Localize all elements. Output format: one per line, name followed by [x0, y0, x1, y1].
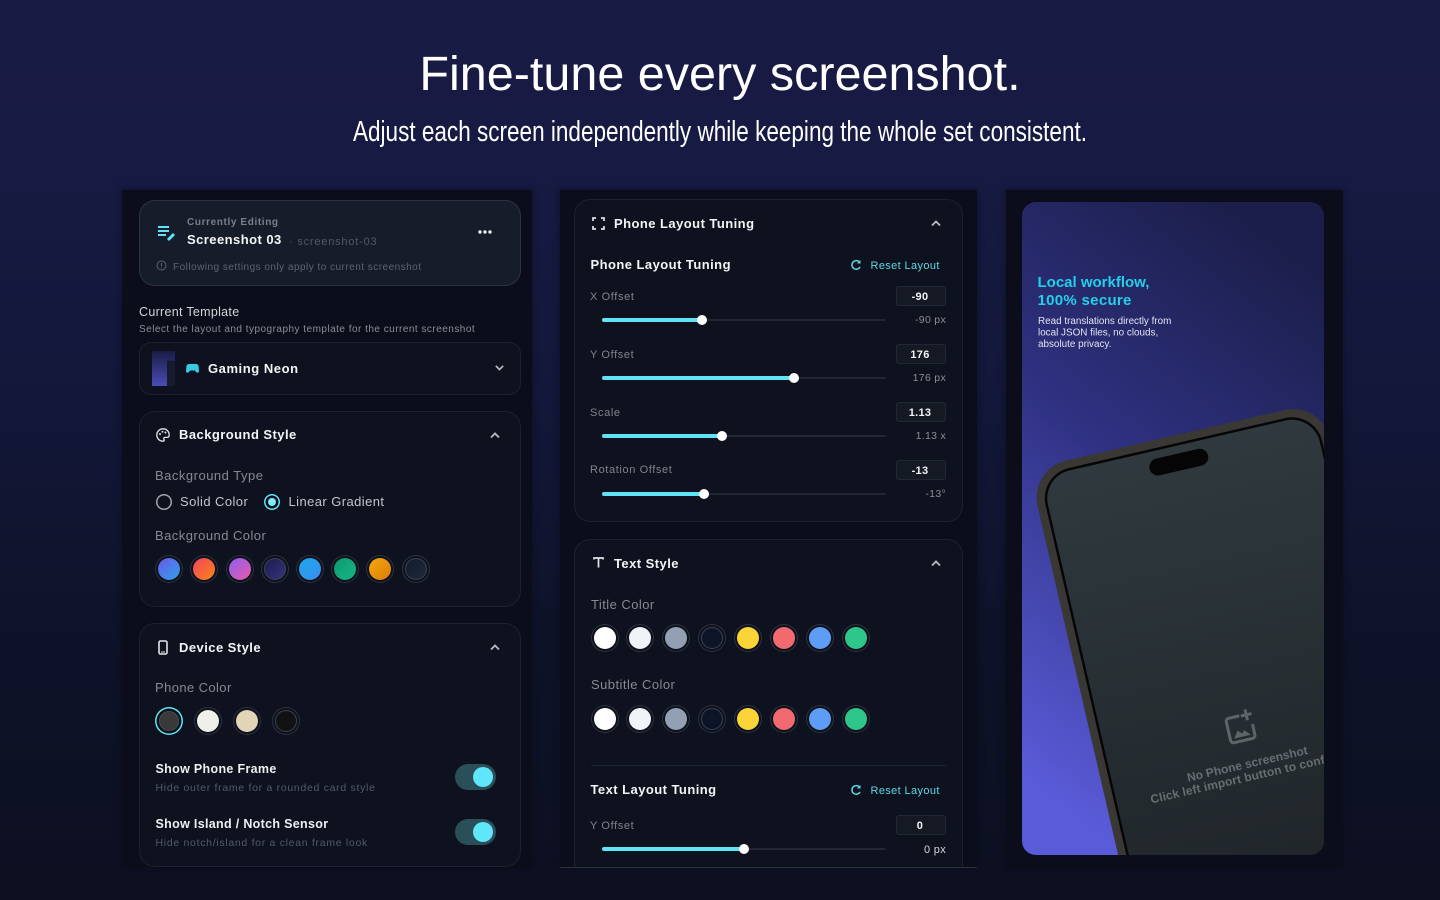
heading: current template: Current Template: [139, 305, 239, 319]
icon: game controller: [186, 364, 199, 373]
hint: island: Hide notch/island for a clean frame look: [156, 837, 368, 849]
card: text style: [574, 539, 963, 868]
icon: chevron up: [490, 644, 500, 650]
link: reset layout: Reset Layout: [870, 784, 940, 796]
card: template selector: [139, 342, 521, 395]
preview headline: 100% secure: [1038, 292, 1132, 309]
label: solid color: Solid Color: [180, 494, 248, 509]
slider: scale: 1.13: [909, 407, 931, 419]
icon: chevron up: [490, 432, 500, 438]
description: current template: Select the layout and typography template for the current screenshot: [139, 324, 475, 335]
card: background style: [139, 411, 521, 607]
subtitle: Adjust each screen independently while keeping the whole set consistent.: [353, 116, 1087, 148]
radio: linear gradient: [264, 494, 280, 510]
title: Fine-tune every screenshot.: [419, 47, 1021, 101]
subheading: phone layout tuning: Phone Layout Tuning: [590, 257, 731, 272]
heading: text style: Text Style: [614, 556, 679, 571]
icon: more menu: [478, 230, 492, 234]
note: settings scope: Following settings only apply to current screenshot: [173, 262, 421, 273]
icon: chevron down: [495, 365, 504, 371]
slider: scale: 1.13 x: [916, 430, 946, 442]
label: background type: Background Type: [155, 468, 263, 483]
panel: layout and text tuning: [560, 190, 977, 868]
label: subtitle color: Subtitle Color: [591, 677, 675, 692]
icon: fullscreen corners: [592, 217, 605, 230]
slider: text y offset: 0 px: [924, 844, 946, 856]
screenshot id: · screenshot-03: [289, 236, 377, 248]
panel: live preview: [1006, 190, 1343, 868]
slider: rotation offset: [590, 460, 946, 500]
slider: x offset: -90: [912, 291, 928, 303]
icon: palette: [156, 428, 170, 442]
template name: Gaming Neon: [208, 361, 299, 376]
heading: phone layout tuning: Phone Layout Tuning: [614, 216, 754, 231]
preview body copy: local JSON files, no clouds,: [1038, 328, 1158, 338]
slider: y offset: 176: [910, 349, 930, 361]
hint: phone frame: Hide outer frame for a rounded card style: [156, 782, 376, 794]
preview body copy: [1038, 316, 1171, 350]
toggle: island: [455, 819, 496, 845]
icon: reset: [851, 260, 861, 270]
preview headline: [1038, 274, 1149, 309]
swatches: subtitle color: [591, 705, 870, 733]
slider: x offset: [590, 286, 946, 326]
card: currently editing: [139, 200, 521, 286]
slider: y offset: 176 px: [913, 372, 946, 384]
slider: rotation offset: Rotation Offset: [590, 464, 672, 476]
slider: text y offset: Y Offset: [590, 820, 634, 832]
toggle: phone frame: [455, 764, 496, 790]
icon: chevron up: [931, 220, 941, 226]
subheading: text layout tuning: Text Layout Tuning: [590, 782, 717, 797]
label: background color: Background Color: [155, 528, 266, 543]
phone mockup: [1036, 409, 1324, 855]
preview screenshot: [1022, 202, 1324, 855]
icon: chevron up: [931, 560, 941, 566]
icon: add image: [1224, 708, 1257, 743]
slider: rotation offset: -13: [912, 465, 928, 477]
heading: background style: Background Style: [179, 427, 297, 442]
slider: scale: Scale: [590, 407, 621, 419]
screenshot name: Screenshot 03: [187, 232, 282, 247]
slider: x offset: -90 px: [915, 314, 946, 326]
preview body copy: Read translations directly from: [1038, 316, 1171, 327]
slider: rotation offset: -13°: [925, 488, 946, 500]
link: reset layout: Reset Layout: [870, 260, 940, 272]
preview body copy: absolute privacy.: [1038, 339, 1111, 350]
label: linear gradient: Linear Gradient: [288, 494, 384, 509]
icon: text: [593, 557, 604, 568]
icon: phone: [158, 640, 168, 655]
empty state message: No Phone screenshot: [1186, 743, 1309, 785]
phone island: [1149, 448, 1208, 476]
label: currently editing: Currently Editing: [187, 216, 279, 228]
card: phone layout tuning: [574, 199, 963, 522]
card: device style: [139, 623, 521, 867]
label: title color: Title Color: [591, 597, 655, 612]
swatches: title color: [591, 624, 870, 652]
preview headline: Local workflow,: [1038, 274, 1149, 291]
swatches: background color: [155, 555, 430, 583]
slider: y offset: [590, 344, 946, 384]
radio: solid color: [156, 494, 172, 510]
swatches: phone color: [155, 707, 300, 735]
label: phone color: Phone Color: [155, 680, 232, 695]
slider: y offset: Y Offset: [590, 349, 634, 361]
setting: show phone frame: Show Phone Frame: [156, 762, 277, 776]
slider: scale: [590, 402, 946, 442]
heading: device style: Device Style: [179, 640, 261, 655]
icon: info: [156, 260, 166, 270]
icon: edit list: [158, 226, 175, 241]
panel: screenshot settings: [122, 190, 532, 868]
slider: x offset: X Offset: [590, 291, 634, 303]
slider: text y offset: [590, 815, 946, 856]
slider: text y offset: 0: [917, 820, 923, 832]
setting: show island: Show Island / Notch Sensor: [156, 817, 328, 831]
icon: reset: [851, 784, 861, 795]
template thumbnail: [152, 351, 175, 386]
